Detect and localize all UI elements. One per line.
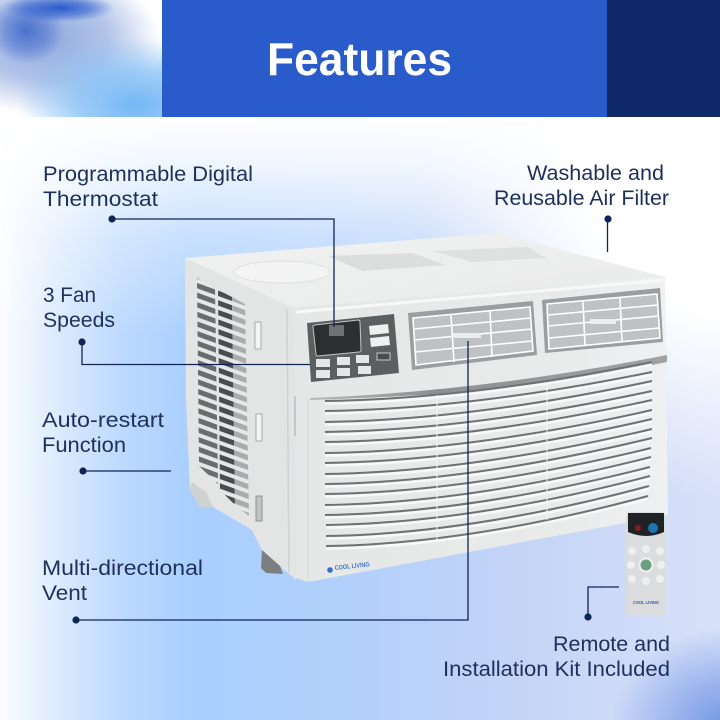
leader: auto-restart	[79, 467, 171, 475]
label: multi-directional vent: Multi-directional	[42, 556, 203, 580]
header gradient swatch	[0, 0, 162, 117]
header blue band	[162, 0, 607, 117]
front grille louvers	[325, 362, 652, 549]
label: auto-restart function	[42, 408, 164, 457]
label: programmable digital thermostat: Thermostat	[43, 187, 158, 211]
air conditioner unit	[185, 233, 668, 582]
label: 3 fan speeds: Speeds	[43, 308, 115, 332]
header navy block	[607, 0, 720, 117]
left air vent	[408, 301, 537, 370]
label: 3 fan speeds	[43, 283, 115, 332]
label: multi-directional vent	[42, 556, 203, 605]
label: multi-directional vent: Vent	[42, 581, 87, 605]
label: programmable digital thermostat: Programmable Digital	[43, 162, 253, 186]
right air vent	[542, 288, 663, 353]
label: remote and kit: Remote and	[553, 632, 670, 656]
label: auto-restart function: Auto-restart	[42, 408, 164, 432]
label: washable filter: Washable and	[527, 161, 664, 185]
leader: vent	[72, 341, 468, 624]
label: remote and kit: Installation Kit Included	[443, 657, 670, 681]
unit front face	[293, 277, 668, 582]
label: programmable digital thermostat	[43, 162, 253, 211]
remote control	[626, 512, 666, 616]
label: remote and kit	[443, 632, 670, 681]
label: auto-restart function: Function	[42, 433, 126, 457]
label: washable filter: Reusable Air Filter	[494, 186, 669, 210]
label: 3 fan speeds: 3 Fan	[43, 283, 96, 307]
unit top panel	[185, 233, 665, 308]
brand logo: COOL LIVING	[334, 561, 370, 572]
leader: fan speeds	[78, 338, 310, 364]
leader: filter	[604, 215, 612, 252]
title: Features	[267, 33, 452, 85]
control panel	[307, 314, 399, 382]
leader: remote	[584, 587, 619, 621]
unit side panel	[185, 258, 296, 580]
remote control: COOL LIVING	[633, 600, 659, 605]
brand logo	[327, 561, 370, 573]
label: washable filter	[494, 161, 669, 210]
leader: thermostat	[108, 215, 334, 327]
